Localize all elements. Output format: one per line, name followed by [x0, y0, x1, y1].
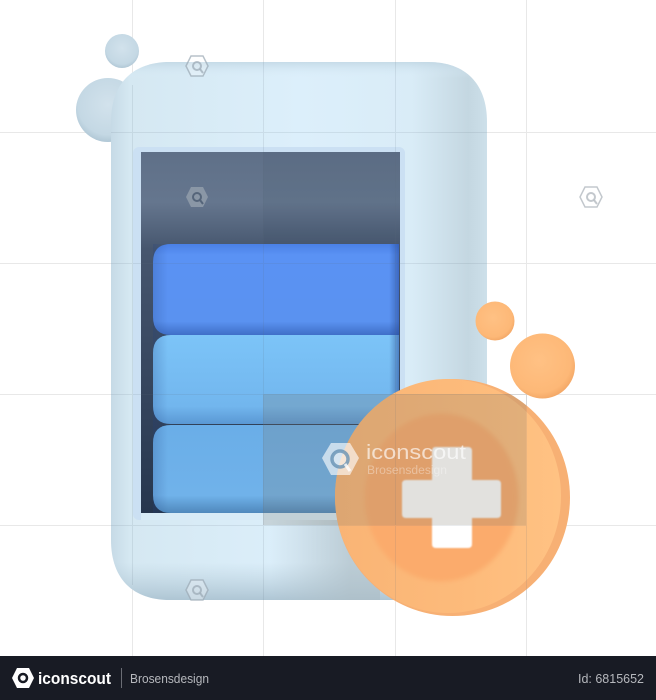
logo: top	[186, 56, 208, 76]
cell: bottom	[153, 425, 399, 513]
grid lines over artwork	[111, 62, 526, 600]
footer brand: iconscout	[38, 669, 111, 688]
cell: top	[153, 244, 399, 335]
footer id: Id: 6815652	[578, 671, 644, 686]
watermark logo	[322, 443, 359, 475]
small watermark logos	[186, 56, 602, 600]
coin inner ring	[364, 414, 518, 582]
plus coin	[335, 379, 570, 616]
logo: window	[186, 187, 208, 207]
logo: right	[580, 187, 602, 207]
darker window tile	[263, 152, 400, 244]
footer author: Brosensdesign	[130, 671, 209, 686]
footer logo	[12, 668, 34, 688]
watermark name: iconscout	[366, 441, 466, 464]
coin face	[335, 379, 561, 613]
blue bubbles	[76, 34, 140, 142]
battery cells	[153, 244, 399, 513]
battery body	[111, 62, 487, 600]
center watermark	[322, 441, 466, 477]
logo: bottom	[186, 580, 208, 600]
plus sign	[402, 447, 501, 548]
coin side	[335, 379, 570, 616]
watermark author: Brosensdesign	[367, 465, 447, 477]
footer bar	[0, 656, 656, 700]
battery window	[141, 152, 400, 513]
orange bubbles	[476, 302, 575, 398]
watermark tint tile	[263, 394, 526, 525]
cell: middle	[153, 335, 399, 424]
window frame	[133, 147, 405, 520]
